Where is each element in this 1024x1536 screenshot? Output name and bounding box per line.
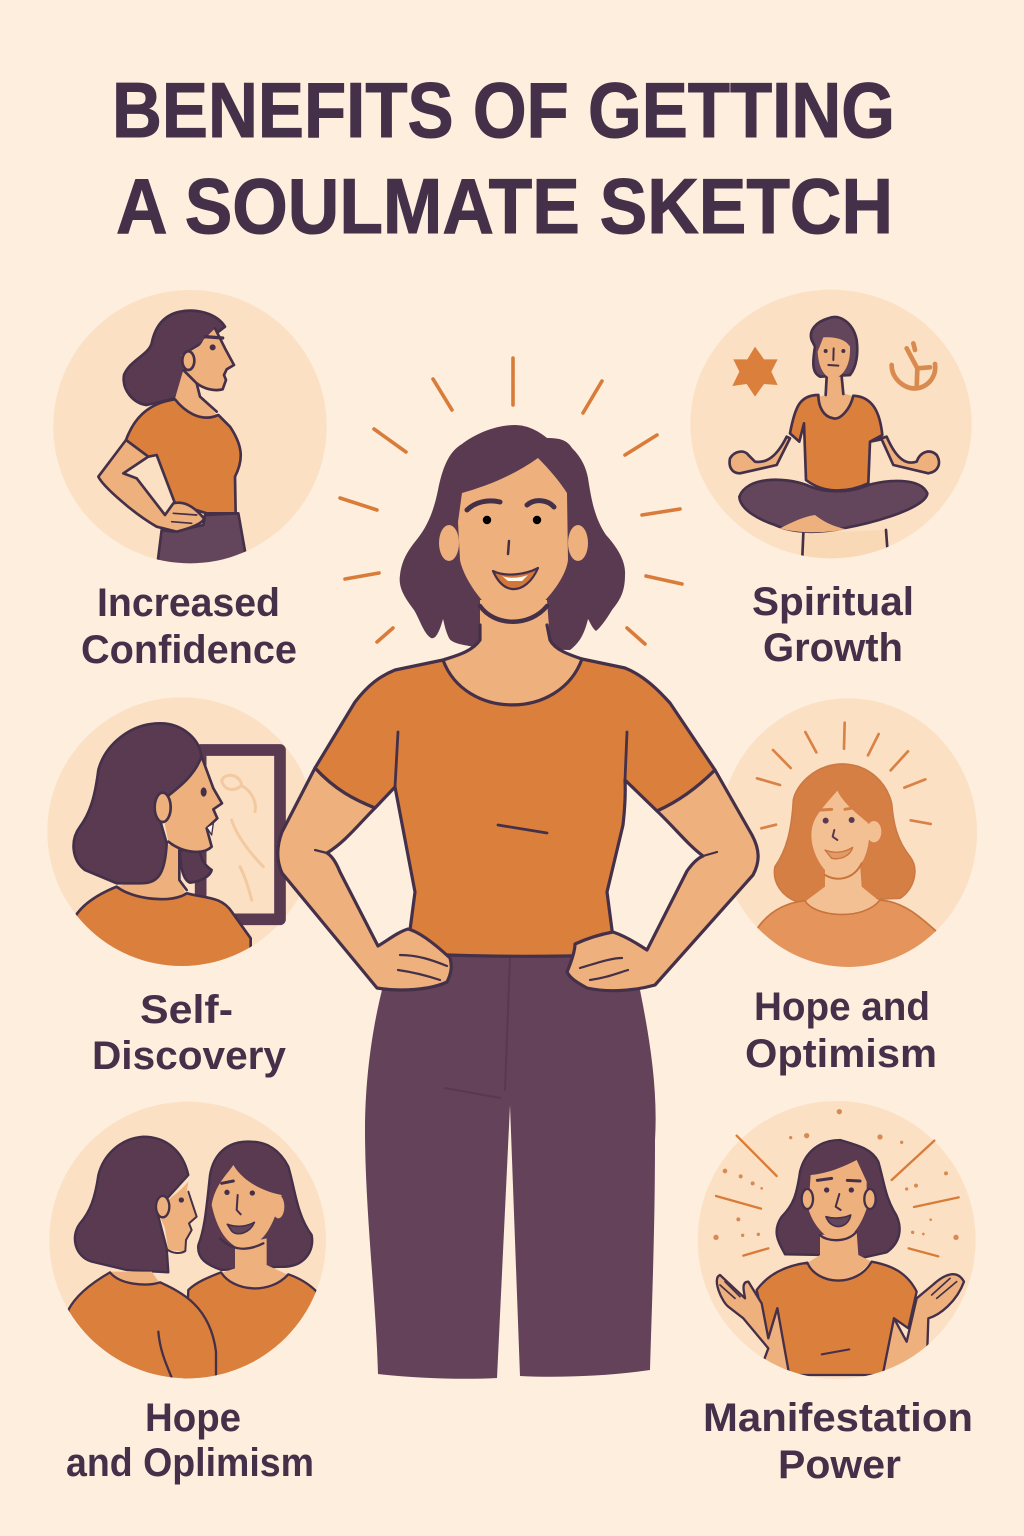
label: Spiritual [752, 580, 914, 624]
label: Self- [140, 988, 233, 1032]
right woman [198, 1142, 312, 1270]
label: Increased [97, 581, 280, 625]
label: Optimism [745, 1032, 937, 1076]
panel: spiritual growth [690, 290, 972, 670]
right arm and hand [567, 770, 758, 991]
label [92, 988, 287, 1078]
illustration: two women facing each other [49, 1102, 326, 1395]
left arm and hand [278, 768, 451, 990]
mirror [201, 750, 280, 919]
label: Power [778, 1443, 901, 1487]
title: BENEFITS OF GETTING [112, 66, 895, 154]
label: and Oplimism [66, 1441, 314, 1485]
label [66, 1396, 314, 1485]
facial features [467, 501, 554, 589]
panel: hope and optimism (left) [49, 1102, 326, 1485]
panel: manifestation power [698, 1101, 976, 1487]
radiating lines [340, 358, 682, 644]
label [703, 1396, 973, 1487]
panel: increased confidence [53, 290, 327, 672]
sun rays [757, 723, 931, 828]
face [458, 458, 568, 623]
title: A SOULMATE SKETCH [116, 162, 893, 250]
label [752, 580, 914, 670]
panel: self-discovery [47, 697, 316, 1078]
pants [365, 950, 656, 1379]
neck [443, 600, 582, 709]
panel: hope and optimism (right) [720, 698, 977, 1076]
left woman [75, 1137, 188, 1272]
label: Growth [763, 626, 903, 670]
title [112, 66, 895, 250]
label: Confidence [81, 628, 297, 672]
illustration: woman looking in mirror [47, 698, 306, 966]
illustration: woman in profile, hand on hip [53, 290, 327, 570]
label [81, 581, 297, 672]
illustration: woman with open hands and sparks [698, 1101, 976, 1379]
label: Manifestation [703, 1396, 973, 1440]
label: Discovery [92, 1034, 287, 1078]
shirt [315, 659, 715, 956]
label: Hope [145, 1396, 241, 1440]
label [745, 985, 937, 1076]
illustration: glowing woman in warm tones [727, 698, 977, 967]
label: Hope and [754, 985, 930, 1029]
ears [439, 525, 588, 561]
illustration: meditating woman with symbols [690, 290, 972, 559]
hair [400, 425, 625, 650]
rays and sparkles [716, 1136, 959, 1256]
central figure: smiling woman with hands on hips [278, 358, 758, 1379]
